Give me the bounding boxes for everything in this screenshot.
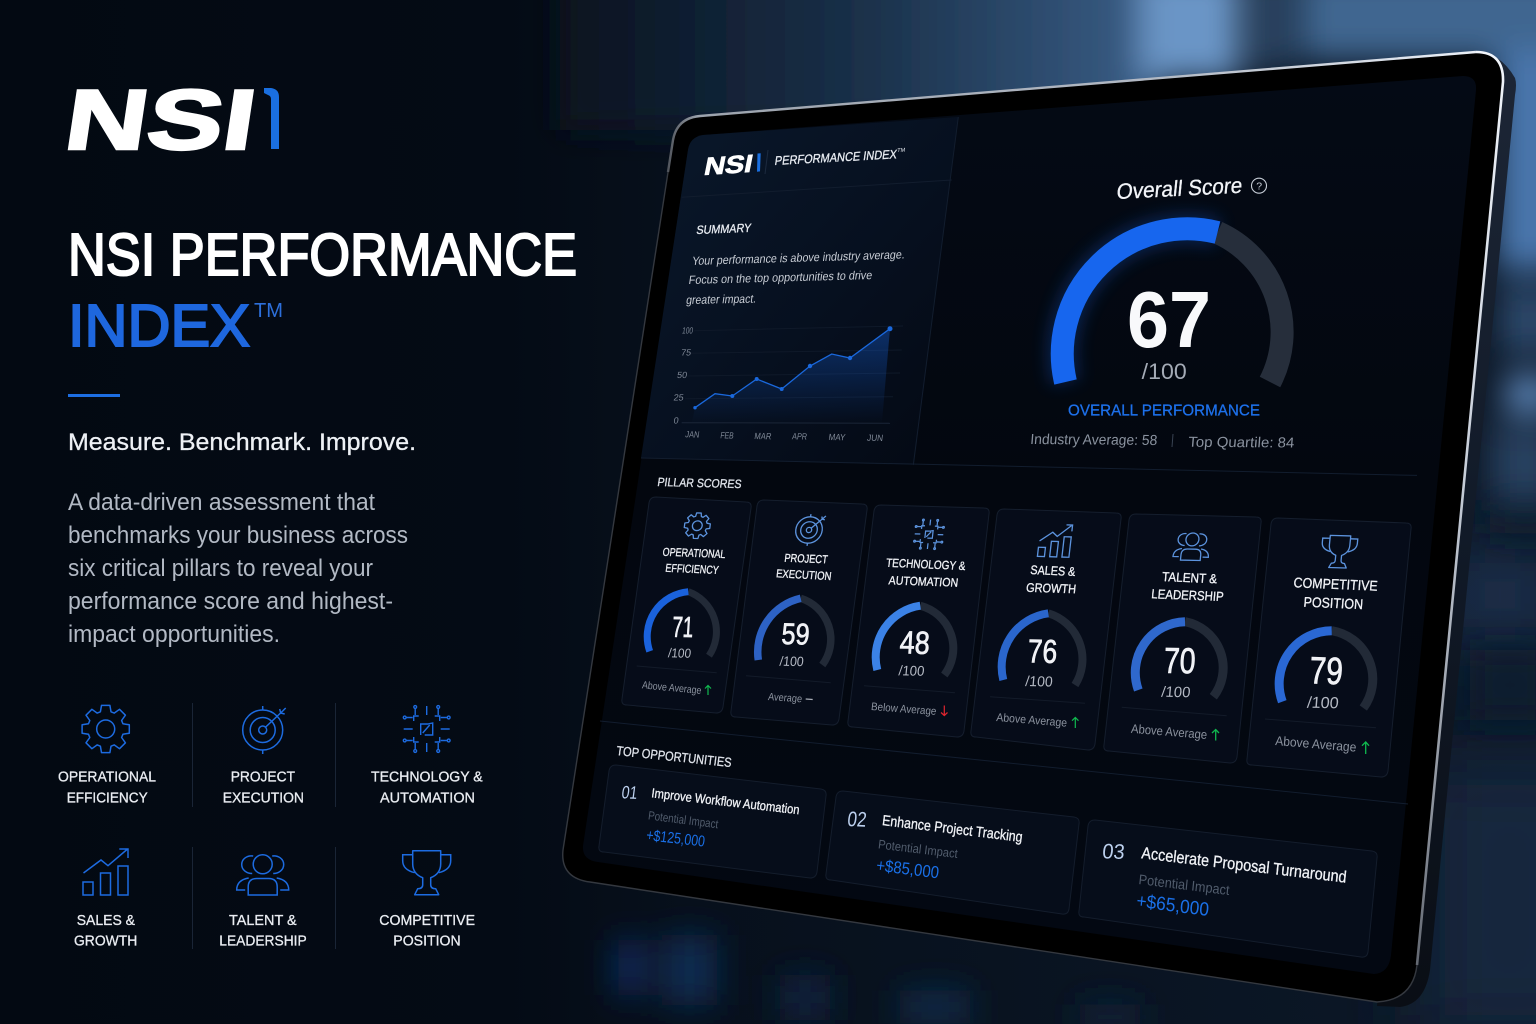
pillar card: talent and leadership: LEADERSHIP [1151, 586, 1224, 604]
dashboard header: NSI [702, 150, 755, 181]
pillar card: competitive position: COMPETITIVE [1293, 574, 1378, 594]
pillar card: sales and growth: SALES & [1030, 563, 1077, 579]
summary text: SUMMARY [696, 221, 752, 237]
pillar card: sales and growth: 76 [1027, 632, 1058, 670]
summary line chart [673, 325, 903, 443]
pillar: operational efficiency: OPERATIONAL [58, 769, 156, 786]
pillar card: operational efficiency: 71 [671, 612, 694, 644]
summary line chart: 50 [676, 370, 688, 380]
pillar card: competitive position: POSITION [1303, 594, 1364, 612]
pillar card: talent and leadership: /100 [1161, 684, 1191, 701]
trend arrow up [1212, 730, 1219, 740]
tablet device [563, 52, 1516, 1007]
opportunity card 03: Accelerate Proposal Turnaround [1141, 843, 1347, 887]
pillar card: competitive position: Above Average [1275, 733, 1357, 755]
benchmarks: Industry Average: 58 [1030, 432, 1158, 449]
pillar card: technology and automation: 48 [899, 624, 931, 661]
pillar: competitive position [379, 851, 475, 950]
pillar card: project execution: EXECUTION [775, 568, 832, 583]
summary text: Focus on the top opportunities to drive [688, 268, 873, 287]
summary line chart: APR [791, 431, 808, 442]
pillar card: technology and automation: /100 [898, 662, 925, 679]
summary line chart: 100 [681, 325, 694, 335]
pillar: sales and growth: GROWTH [74, 933, 137, 950]
pillar card: project execution: /100 [779, 654, 804, 669]
pillar: talent and leadership [219, 855, 307, 950]
pillar: sales and growth: SALES & [77, 912, 135, 929]
pillar card: technology and automation [848, 505, 989, 737]
six pillars icon grid [58, 703, 483, 950]
pillar card: operational efficiency: /100 [667, 645, 692, 661]
pillar: sales and growth [74, 849, 137, 950]
opportunity card 03: 03 [1101, 840, 1126, 864]
benchmarks [1030, 432, 1295, 452]
help icon: ? [1256, 180, 1262, 192]
summary text: greater impact. [685, 292, 757, 307]
pillar card: sales and growth [971, 509, 1121, 750]
pillar: technology and automation: TECHNOLOGY & [371, 769, 483, 786]
opportunity card 02 [826, 791, 1079, 914]
trend arrow down [941, 706, 948, 716]
opportunity card 03 [1079, 820, 1377, 957]
pillar card: project execution [731, 500, 867, 725]
pillar card: sales and growth: /100 [1025, 674, 1053, 691]
pillar card: operational efficiency: EFFICIENCY [665, 563, 720, 577]
tablet side edge [1377, 52, 1516, 1007]
pillar card: competitive position [1247, 518, 1411, 777]
opportunity card 01 [599, 765, 826, 878]
title: INDEX [68, 293, 250, 359]
pillar card: technology and automation: AUTOMATION [888, 573, 959, 590]
pillar card: project execution: 59 [781, 618, 811, 652]
description paragraph: performance score and highest- [68, 588, 393, 615]
pillar: operational efficiency [58, 705, 156, 806]
pillar card: talent and leadership [1104, 514, 1261, 763]
pillar: project execution: EXECUTION [223, 789, 304, 806]
gauge value arc [1062, 229, 1218, 382]
overall performance label: OVERALL PERFORMANCE [1068, 403, 1260, 420]
opportunity card 03: +$65,000 [1136, 891, 1210, 921]
pillar: project execution [223, 706, 304, 806]
dashboard header: TM [897, 148, 906, 154]
summary line chart: FEB [720, 430, 734, 441]
overall score gauge [1030, 173, 1295, 452]
opportunity card 02: Potential Impact [877, 837, 959, 861]
summary line chart: JAN [685, 429, 700, 440]
pillar card: technology and automation: TECHNOLOGY & [885, 556, 966, 573]
top opportunities heading: TOP OPPORTUNITIES [616, 743, 733, 770]
pillar card: talent and leadership: Above Average [1130, 722, 1208, 742]
trend dash [806, 698, 813, 700]
pillar: competitive position: COMPETITIVE [379, 912, 475, 929]
pillar: project execution: PROJECT [231, 769, 295, 786]
description paragraph: impact opportunities. [68, 621, 280, 648]
description paragraph: benchmarks your business across [68, 522, 408, 549]
overall score gauge: /100 [1142, 359, 1187, 384]
screen [583, 76, 1476, 974]
score 67: 67 [1127, 275, 1211, 364]
pillar: technology and automation [371, 706, 483, 806]
summary line chart: 75 [680, 348, 692, 358]
pillar card: operational efficiency [622, 497, 751, 713]
pillar card: operational efficiency: Above Average [641, 679, 702, 697]
opportunity card 03: Potential Impact [1138, 871, 1230, 898]
pillar card: talent and leadership: 70 [1163, 640, 1197, 681]
pillar: talent and leadership: LEADERSHIP [219, 933, 307, 950]
opportunity card 01: 01 [620, 782, 639, 803]
summary line chart: 0 [673, 415, 679, 425]
pillar: talent and leadership: TALENT & [229, 912, 297, 929]
title: NSI PERFORMANCE [68, 222, 577, 288]
benchmarks: Top Quartile: 84 [1188, 435, 1295, 452]
title: TM [254, 300, 283, 322]
pillar: technology and automation: AUTOMATION [380, 789, 475, 806]
opportunity card 02: Enhance Project Tracking [881, 813, 1023, 846]
rim highlight: right edge [1417, 52, 1503, 965]
summary text [685, 221, 906, 307]
pillar: operational efficiency: EFFICIENCY [67, 789, 148, 806]
summary line chart: MAR [754, 431, 773, 441]
summary line chart: 25 [673, 393, 684, 403]
pillar card: talent and leadership: TALENT & [1161, 569, 1218, 586]
pillar card: technology and automation: Below Average [870, 701, 937, 718]
opportunity card 01: +$125,000 [645, 827, 706, 851]
pillar card: sales and growth: GROWTH [1025, 581, 1077, 596]
opportunity card 01: Improve Workflow Automation [651, 785, 801, 817]
description paragraph: six critical pillars to reveal your [68, 555, 373, 582]
pillar: competitive position: POSITION [393, 933, 461, 950]
opportunity card 02: +$85,000 [875, 856, 940, 882]
tagline: Measure. Benchmark. Improve. [68, 429, 416, 456]
rim highlight: top edge [668, 52, 1476, 172]
pillar card: project execution: Average [767, 691, 803, 705]
trend arrow up [1362, 742, 1369, 754]
pillar card: competitive position: /100 [1306, 694, 1340, 712]
logo: NSI: NSI [59, 73, 262, 168]
opportunity card 02: 02 [846, 808, 868, 832]
accent divider [68, 394, 120, 397]
pillar card: competitive position: 79 [1309, 650, 1344, 693]
summary text: Your performance is above industry average. [691, 247, 906, 268]
title [68, 222, 577, 359]
summary line chart: JUN [866, 433, 884, 443]
pillar card: operational efficiency: OPERATIONAL [662, 547, 727, 561]
tablet front bezel [563, 52, 1503, 1002]
help icon [1252, 178, 1266, 193]
pillar scores heading: PILLAR SCORES [657, 475, 743, 491]
description paragraph [68, 489, 408, 648]
description paragraph: A data-driven assessment that [68, 489, 375, 516]
trend arrow up [1072, 718, 1078, 728]
opportunity card 01: Potential Impact [647, 808, 720, 831]
summary line chart: MAY [828, 432, 846, 442]
dashboard header: PERFORMANCE INDEX [774, 147, 898, 168]
gauge track [1218, 232, 1282, 382]
dashboard header [702, 147, 906, 181]
pillar card: sales and growth: Above Average [996, 712, 1068, 730]
pillar card: project execution: PROJECT [784, 553, 828, 566]
summary panel background [641, 117, 958, 465]
overall score heading: Overall Score [1116, 173, 1244, 204]
trend arrow up [705, 686, 711, 695]
